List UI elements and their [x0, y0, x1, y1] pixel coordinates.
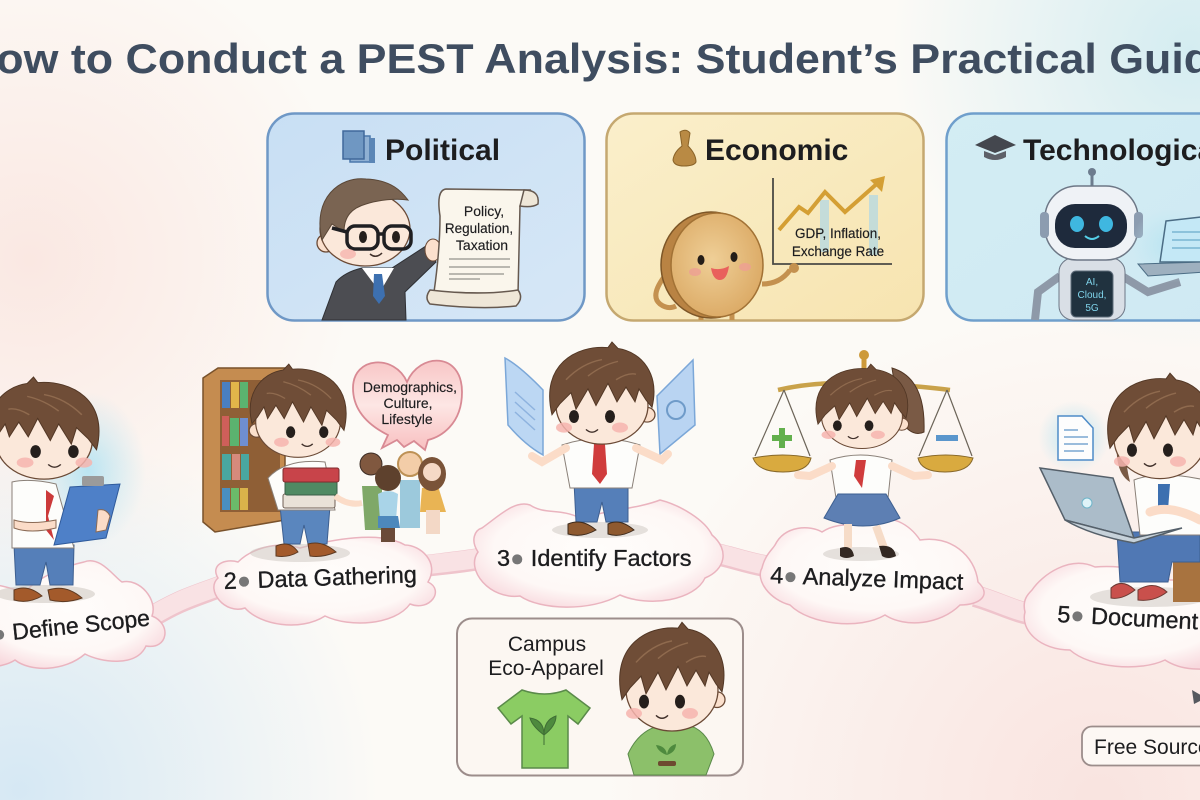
character: robot: AI,	[1086, 277, 1098, 288]
kid 1: clipboard student	[0, 377, 120, 603]
step 3: identify factors	[474, 342, 723, 607]
panel: technological	[946, 114, 1200, 320]
label 2: 2● Data Gathering	[223, 561, 417, 594]
panel heading	[488, 633, 604, 680]
scales of balance	[753, 350, 973, 472]
character: coin	[656, 212, 799, 320]
character: boy in eco shirt	[620, 622, 725, 775]
kid 5: student at laptop	[1040, 373, 1200, 607]
heart speech bubble	[353, 361, 462, 450]
heart speech bubble: Demographics,	[363, 379, 457, 395]
group of children	[360, 452, 446, 542]
cloud 2	[214, 537, 435, 625]
heading: economic: Economic	[705, 134, 848, 167]
kid 2: books student	[249, 364, 362, 562]
label 3: 3● Identify Factors	[497, 545, 691, 571]
cloud 1	[0, 561, 165, 668]
holo panel left	[505, 358, 543, 455]
chart: growth	[773, 176, 892, 264]
badge: free sources	[1082, 726, 1200, 766]
step 2: data gathering	[203, 361, 462, 625]
heart speech bubble: Lifestyle	[381, 411, 433, 427]
label 4: 4● Analyze Impact	[770, 562, 964, 595]
scroll: policy: Regulation,	[445, 221, 513, 236]
panel: economic	[606, 114, 924, 320]
panel heading: Eco-Apparel	[488, 657, 604, 680]
document icon with glow	[1038, 401, 1110, 473]
cloud 5	[1024, 563, 1200, 669]
icon: graduation cap	[975, 135, 1016, 160]
bookshelf	[203, 368, 285, 532]
heading: political: Political	[385, 134, 500, 167]
step 4: analyze impact	[753, 350, 984, 624]
chart: growth: GDP, Inflation,	[795, 226, 881, 241]
icon: money bag	[673, 130, 696, 166]
panel: political	[268, 114, 584, 320]
character: official	[317, 179, 441, 320]
heart speech bubble: Culture,	[383, 395, 433, 411]
cloud 4	[760, 518, 984, 624]
character: robot: Cloud,	[1078, 290, 1106, 301]
icon: green t-shirt	[498, 690, 590, 768]
icon: books	[343, 131, 375, 163]
cloud 3	[474, 500, 723, 607]
arrow to free sources	[1192, 690, 1200, 704]
glow behind kid 1	[30, 392, 146, 548]
step 5: document	[1024, 373, 1200, 669]
path connectors	[150, 552, 1040, 618]
scroll: policy: Taxation	[456, 237, 508, 253]
label 5: 5● Document	[1057, 601, 1199, 634]
panel: campus eco-apparel	[457, 618, 743, 776]
character: robot: 5G	[1085, 303, 1099, 314]
character: robot	[1035, 168, 1180, 320]
panel heading: Campus	[508, 633, 586, 656]
kid 4: girl with scales	[798, 364, 928, 561]
icon: glowing laptop	[1130, 207, 1200, 283]
scroll: policy	[427, 189, 538, 308]
step 1: define scope	[0, 377, 165, 668]
kid 3: identifying student	[532, 342, 668, 538]
holo panel right	[657, 360, 695, 454]
chart: growth: Exchange Rate	[792, 244, 884, 259]
scroll: policy: Policy,	[464, 203, 504, 219]
